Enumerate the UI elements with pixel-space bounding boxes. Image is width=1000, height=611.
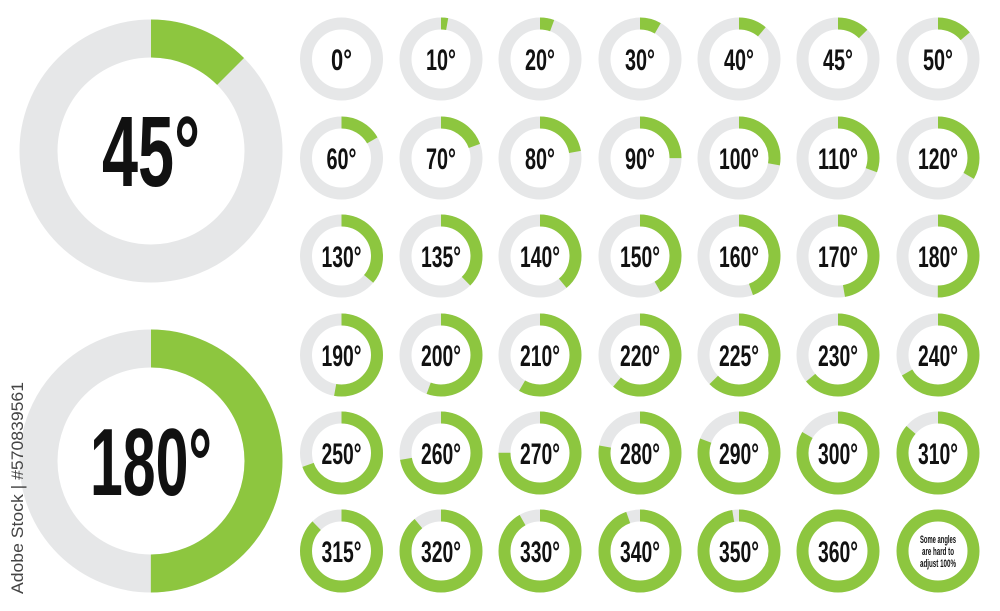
- note ring: [902, 516, 974, 586]
- small ring grid: 290°: [719, 438, 759, 471]
- small ring grid: 310°: [918, 438, 958, 471]
- small ring grid: 100°: [719, 143, 759, 176]
- small ring grid: 260°: [421, 438, 461, 471]
- small ring grid: 150°: [620, 241, 660, 274]
- small ring grid: 170°: [818, 241, 858, 274]
- row 4: 190°: [322, 340, 362, 373]
- note ring: are hard to: [922, 546, 954, 558]
- small ring grid: 160°: [719, 241, 759, 274]
- row 3: [306, 220, 377, 292]
- row 2: 60°: [326, 143, 356, 176]
- small ring grid: 120°: [918, 143, 958, 176]
- small ring grid: 200°: [421, 340, 461, 373]
- small ring grid: 110°: [818, 143, 858, 176]
- big ring: 45: [38, 38, 264, 264]
- small ring grid: 350°: [719, 536, 759, 569]
- big ring: 180: 180°: [90, 409, 212, 516]
- row 6: [306, 516, 377, 586]
- row 1: 0°: [331, 44, 352, 77]
- row 1: [306, 24, 377, 94]
- small ring grid: 270°: [520, 438, 560, 471]
- small ring grid: 210°: [520, 340, 560, 373]
- note ring: Some angles: [920, 534, 956, 546]
- row 3: 130°: [322, 241, 362, 274]
- small ring grid: 300°: [818, 438, 858, 471]
- small ring grid: 90°: [625, 143, 655, 176]
- small ring grid: 340°: [620, 536, 660, 569]
- small ring grid: 40°: [724, 44, 754, 77]
- row 4: [306, 320, 377, 390]
- small ring grid: 70°: [426, 143, 456, 176]
- watermark text: Adobe Stock | #570839561: [8, 382, 27, 594]
- small ring grid: 220°: [620, 340, 660, 373]
- small ring grid: 50°: [923, 44, 953, 77]
- small ring grid: 180°: [918, 241, 958, 274]
- row 6: 315°: [322, 536, 362, 569]
- small ring grid: 20°: [525, 44, 555, 77]
- big ring: 45: 45°: [102, 96, 200, 208]
- small ring grid: 320°: [421, 536, 461, 569]
- small ring grid: 135°: [421, 241, 461, 274]
- small ring grid: [306, 24, 974, 586]
- small ring grid: 80°: [525, 143, 555, 176]
- small ring grid: 30°: [625, 44, 655, 77]
- small ring grid: 280°: [620, 438, 660, 471]
- row 5: 250°: [322, 438, 362, 471]
- small ring grid: 230°: [818, 340, 858, 373]
- small ring grid: 45°: [823, 44, 853, 77]
- small ring grid: 225°: [719, 340, 759, 373]
- row 2: [306, 122, 377, 194]
- note ring: adjust 100%: [920, 558, 956, 570]
- small ring grid: 330°: [520, 536, 560, 569]
- small ring grid: 140°: [520, 241, 560, 274]
- small ring grid: 240°: [918, 340, 958, 373]
- row 5: [306, 418, 377, 488]
- small ring grid: 10°: [426, 44, 456, 77]
- big ring: 180: [38, 348, 264, 574]
- small ring grid: 360°: [818, 536, 858, 569]
